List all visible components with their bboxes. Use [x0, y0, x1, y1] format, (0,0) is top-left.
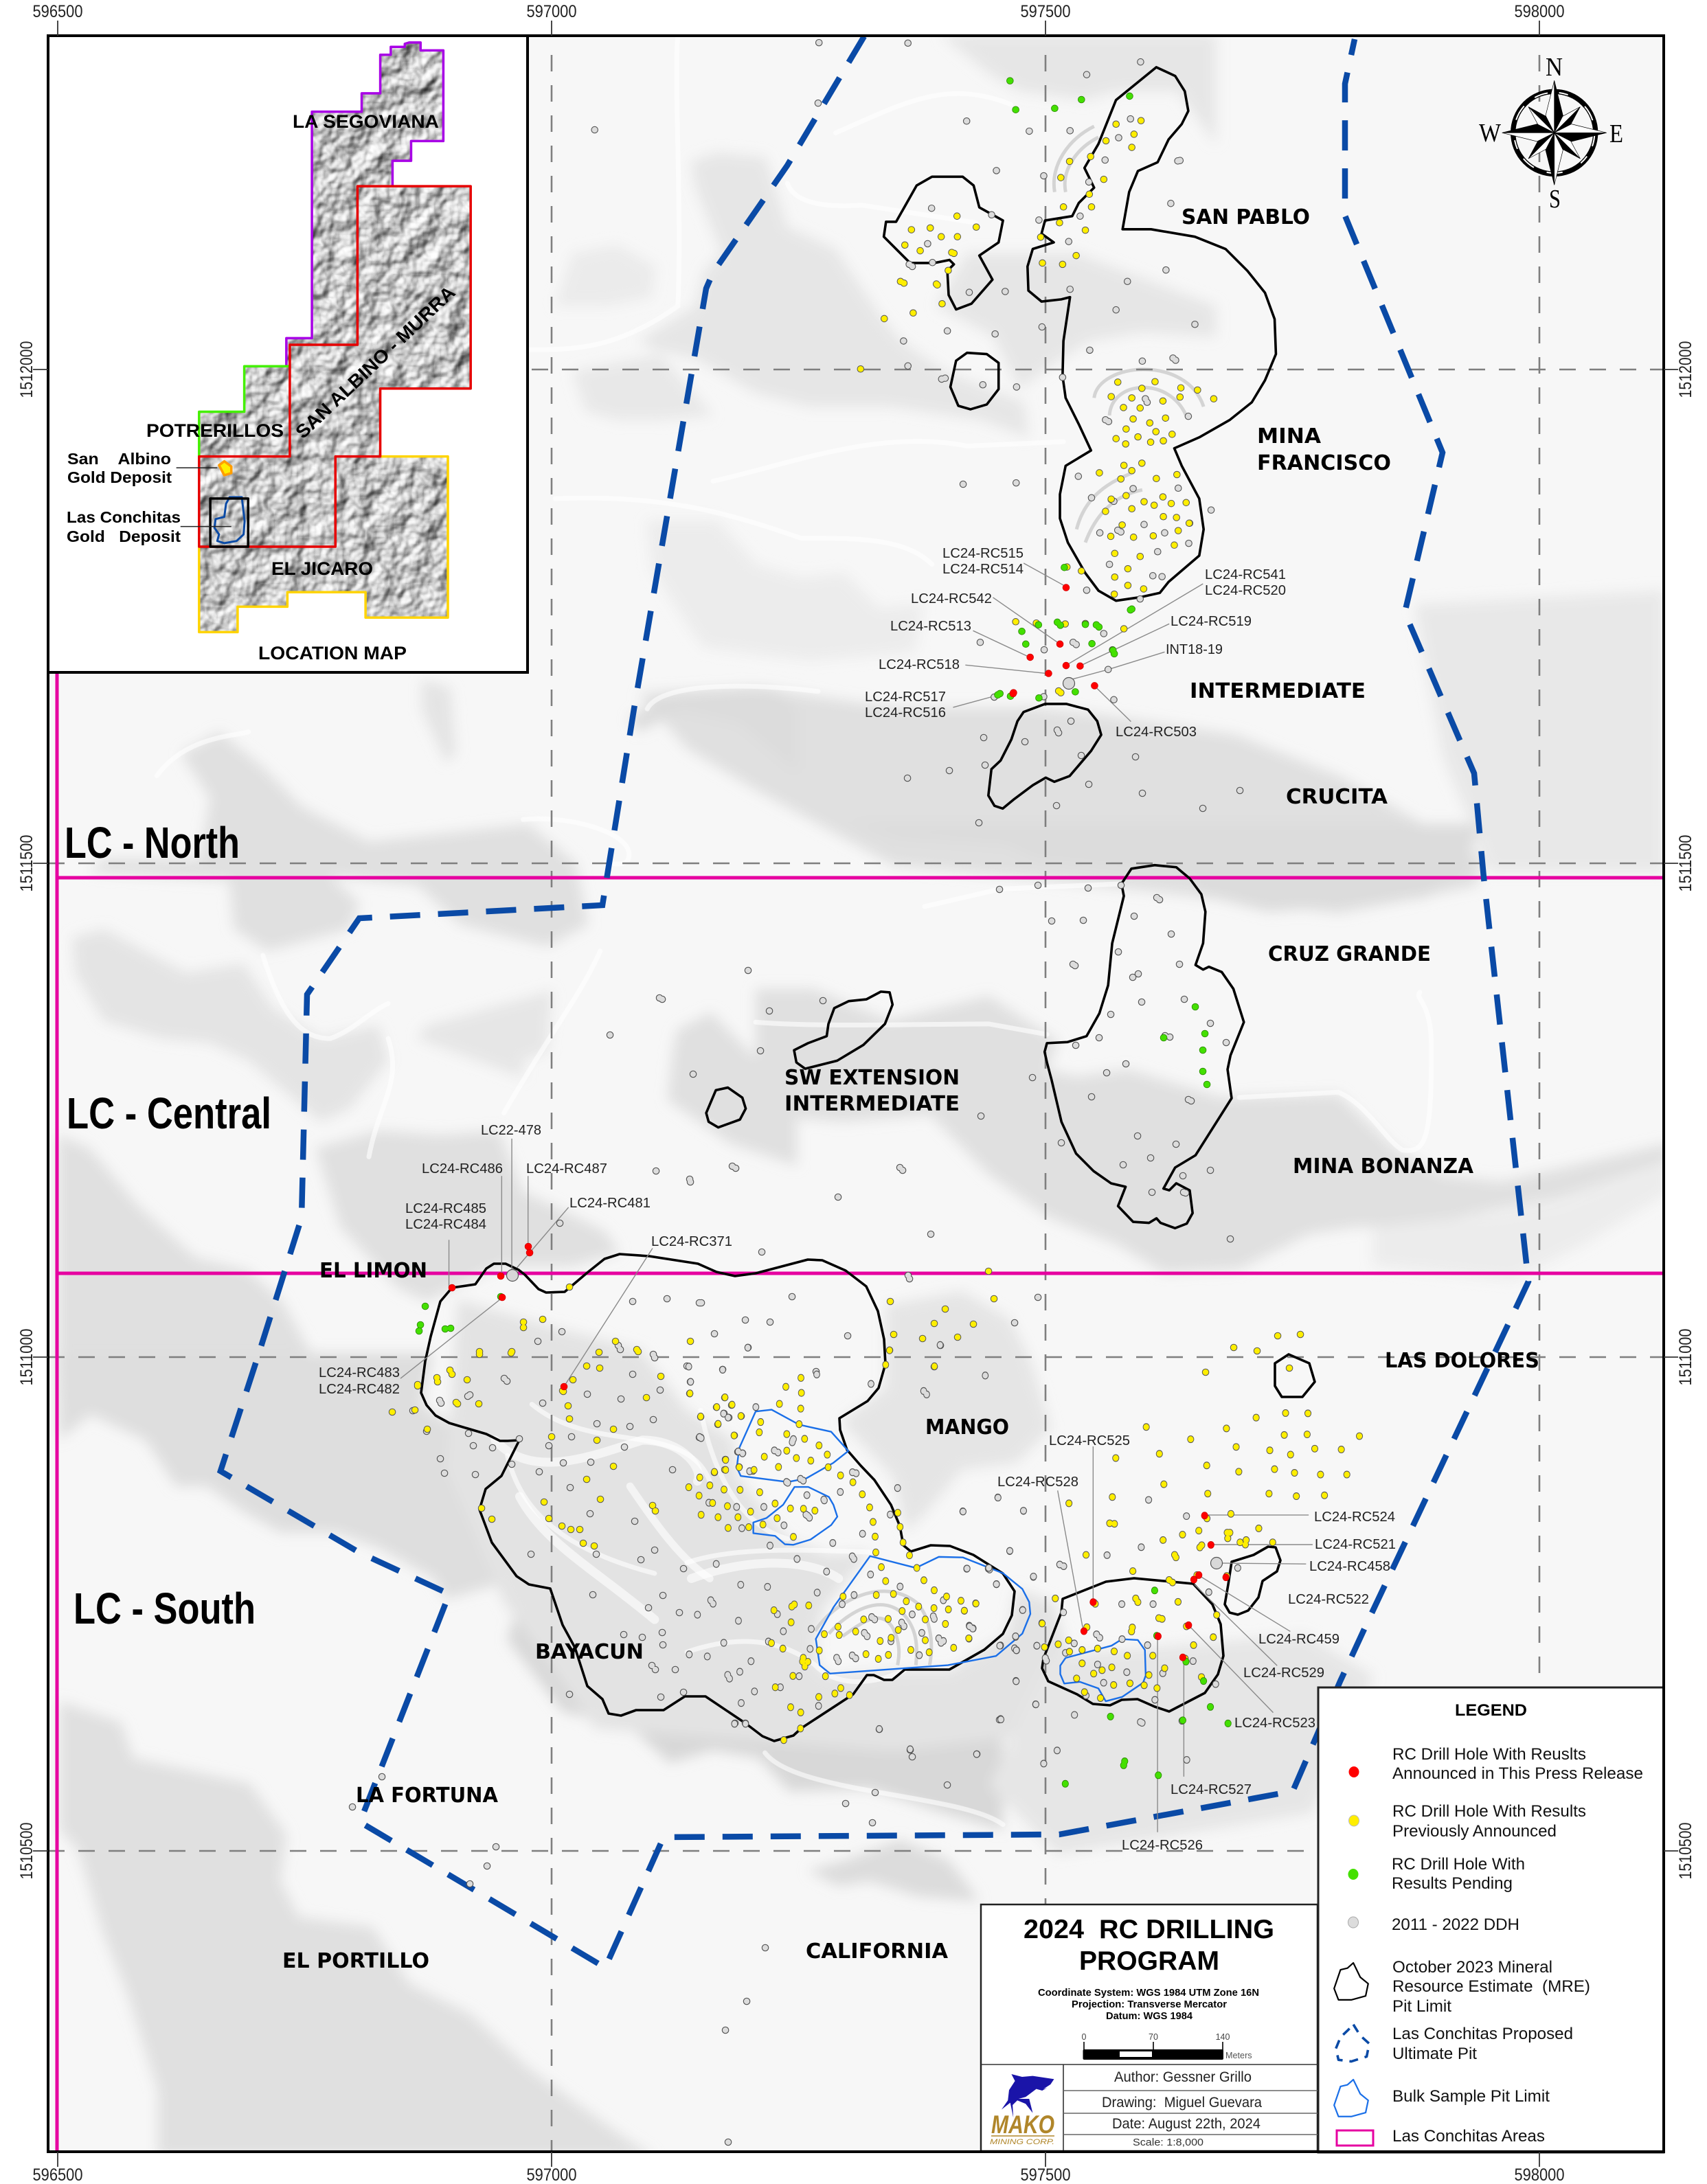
axis coordinate labels: 1512000 [17, 341, 36, 398]
legend title: LEGEND [1455, 1701, 1527, 1720]
drill hole labels: LC24-RC459 [1258, 1631, 1339, 1647]
zone name labels: MANGO [925, 1415, 1009, 1440]
bulk sample pit limits [737, 1410, 1146, 1701]
main title: PROGRAM [1079, 1946, 1219, 1976]
axis coordinate labels: 1510500 [17, 1823, 36, 1879]
legend: proposed ultimate pit: Las Conchitas Proposed [1392, 2025, 1573, 2043]
axis coordinate labels: 1511500 [17, 835, 36, 891]
drill hole labels: LC24-RC503 [1116, 724, 1197, 740]
credits: Date: August 22th, 2024 [1112, 2116, 1261, 2132]
legend: green hole: Results Pending [1392, 1874, 1513, 1893]
zone name labels: MINA [1257, 424, 1322, 448]
2011-2022 DDH holes north [595, 43, 1211, 700]
axis coordinate labels: 598000 [1514, 2, 1565, 21]
zone name labels: EL LIMON [319, 1259, 427, 1283]
icon: compass rose: N [1546, 53, 1563, 82]
zone name labels: BAYACUN [535, 1640, 644, 1664]
RC holes this release central [452, 1247, 564, 1387]
drill holes: Bayacun core [689, 1345, 1042, 1749]
drill hole labels: LC24-RC520 [1205, 582, 1286, 598]
drill hole labels: LC24-RC528 [997, 1474, 1078, 1490]
axis coordinate labels: 597500 [1021, 2, 1070, 21]
drill hole labels: LC24-RC518 [879, 657, 960, 672]
credits [1102, 2069, 1262, 2148]
terrain: Bayacun pit surroundings [446, 1300, 1076, 1751]
large DDH marker LC22-478 [507, 1269, 518, 1282]
drill hole labels: LC24-RC525 [1049, 1433, 1130, 1448]
drill hole labels: LC22-478 [481, 1122, 541, 1138]
scale bar [1082, 2032, 1252, 2060]
drill holes: north zone [595, 43, 1214, 700]
leader lines [400, 563, 1313, 1832]
terrain: LC north-central left slopes [58, 679, 797, 1353]
zone name labels: CRUZ GRANDE [1268, 942, 1431, 966]
credits: Drawing: Miguel Guevara [1102, 2095, 1262, 2111]
legend: MRE pit limit: October 2023 Mineral [1392, 1958, 1552, 1977]
Las Conchitas area boundaries [57, 672, 1664, 2152]
drill hole labels: LC24-RC516 [865, 705, 946, 720]
icon: Mako Mining logo: MAKO [991, 2111, 1054, 2139]
scale bar: 140 [1216, 2032, 1230, 2042]
drill holes: east zone [963, 1413, 1359, 1784]
RC holes this release north [1013, 588, 1094, 694]
axis coordinate labels: 1512000 [1676, 341, 1695, 398]
legend: red hole: Announced in This Press Release [1392, 1764, 1643, 1783]
pit: San Pablo / Mina Francisco [884, 67, 1276, 601]
zone name labels: MINA BONANZA [1293, 1154, 1474, 1179]
axis coordinate labels: 1510500 [1676, 1823, 1695, 1879]
legend: yellow hole: RC Drill Hole With Results [1392, 1802, 1586, 1821]
axis coordinate labels: 597000 [526, 2, 577, 21]
inset labels [67, 111, 460, 663]
drill hole labels: LC24-RC517 [865, 689, 946, 705]
inset labels: Gold Deposit [67, 527, 181, 545]
axis coordinate labels: 1511000 [1676, 1328, 1695, 1386]
coordinate system note: Datum: WGS 1984 [1106, 2010, 1193, 2022]
coordinate system note: Projection: Transverse Mercator [1072, 1999, 1227, 2010]
drill hole labels: LC24-RC487 [526, 1161, 607, 1176]
zone name labels: SW EXTENSION [784, 1066, 960, 1090]
coordinate system note: Coordinate System: WGS 1984 UTM Zone 16N [1038, 1987, 1259, 1999]
drill hole labels: LC24-RC482 [319, 1381, 400, 1397]
drill holes: central and El Limon zones [352, 721, 1300, 2142]
legend: yellow hole [1349, 1802, 1586, 1841]
drill hole labels: LC24-RC526 [1122, 1837, 1203, 1853]
pit: small SW circle [706, 1088, 746, 1128]
drill hole labels: LC24-RC484 [405, 1216, 486, 1232]
zone name labels [282, 205, 1539, 1973]
inset labels: Gold Deposit [67, 468, 172, 486]
zone name labels: EL PORTILLO [282, 1949, 429, 1973]
inset concession boundaries [177, 43, 471, 632]
drill hole labels: LC24-RC371 [651, 1233, 732, 1249]
legend: proposed ultimate pit [1336, 2025, 1573, 2063]
roads and terrace lines [157, 34, 1432, 1825]
drill hole labels: LC24-RC515 [942, 545, 1024, 561]
axis coordinate labels: 1511000 [17, 1328, 36, 1386]
inset labels: LA SEGOVIANA [293, 111, 439, 132]
panel: legend [1318, 1687, 1664, 2152]
inset terrain hillshade [185, 38, 488, 642]
pit: east Las Dolores [1042, 1578, 1223, 1711]
zone name labels: SAN PABLO [1182, 205, 1310, 229]
credits: Scale: 1:8,000 [1133, 2137, 1203, 2148]
pit: Cruz Grande / Mina Bonanza and SW Extension [794, 865, 1244, 1228]
drill hole labels: LC24-RC514 [942, 561, 1024, 577]
scale bar: 70 [1149, 2032, 1158, 2042]
legend: red hole [1349, 1745, 1643, 1783]
drill hole labels: INT18-19 [1166, 641, 1223, 657]
drill hole labels: LC24-RC519 [1171, 613, 1252, 629]
legend: green hole: RC Drill Hole With [1392, 1855, 1525, 1874]
area labels LC North Central South [65, 818, 271, 1633]
legend: yellow hole: Previously Announced [1392, 1822, 1557, 1841]
legend: MRE pit limit: Pit Limit [1392, 1997, 1451, 2016]
zone name labels: INTERMEDIATE [784, 1092, 960, 1116]
zone name labels: LAS DOLORES [1385, 1349, 1539, 1373]
terrain: LC south slopes [56, 1353, 1003, 2157]
drill hole labels: LC24-RC527 [1171, 1782, 1252, 1797]
zone name labels: LA FORTUNA [356, 1784, 499, 1808]
legend: green hole [1348, 1855, 1525, 1893]
panel: location map inset [48, 36, 528, 672]
drill hole labels: LC24-RC483 [319, 1365, 400, 1380]
area labels LC North Central South: LC - Central [67, 1089, 271, 1138]
icon: compass rose: W [1479, 119, 1501, 148]
MRE pit limits [421, 67, 1315, 1741]
inset labels: SAN ALBINO - MURRA [291, 282, 460, 442]
RC holes previously announced central [392, 1271, 1300, 1546]
legend: red hole: RC Drill Hole With Reuslts [1392, 1745, 1586, 1764]
axis coordinate labels: 1511500 [1676, 835, 1695, 891]
drill hole labels: LC24-RC458 [1309, 1558, 1390, 1574]
credits: Author: Gessner Grillo [1114, 2069, 1252, 2085]
drill hole labels [319, 545, 1396, 1853]
panel: title block [981, 1904, 1318, 2151]
zone name labels: FRANCISCO [1257, 451, 1391, 475]
drill hole labels: LC24-RC486 [422, 1161, 503, 1176]
drill hole labels: LC24-RC541 [1205, 567, 1286, 582]
legend: proposed ultimate pit: Ultimate Pit [1392, 2045, 1477, 2063]
inset labels: EL JICARO [271, 558, 373, 579]
axis coordinate labels: 596500 [33, 2, 82, 21]
main title: 2024 RC DRILLING [1024, 1915, 1274, 1944]
RC holes pending central [419, 1007, 1207, 1331]
zone name labels: INTERMEDIATE [1190, 679, 1366, 703]
icon: Mako Mining logo [990, 2074, 1054, 2146]
proposed ultimate pit [221, 36, 1528, 1968]
legend: MRE pit limit [1334, 1958, 1590, 2016]
zone name labels: CRUCITA [1286, 785, 1388, 809]
drill hole labels: LC24-RC542 [911, 591, 992, 606]
inset labels: San Albino [67, 450, 171, 468]
area labels LC North Central South: LC - North [65, 818, 240, 867]
drill hole labels: LC24-RC529 [1243, 1665, 1324, 1681]
icon: compass rose: E [1609, 120, 1623, 148]
legend: bulk sample [1334, 2080, 1550, 2117]
drill hole labels: LC24-RC481 [569, 1195, 651, 1211]
inset labels: POTRERILLOS [146, 420, 284, 441]
inset labels: LOCATION MAP [258, 643, 407, 663]
drill hole labels: LC24-RC524 [1314, 1509, 1395, 1525]
area labels LC North Central South: LC - South [74, 1584, 256, 1633]
large DDH marker LC24-RC458 [1210, 1558, 1223, 1569]
scale bar: Meters [1225, 2051, 1252, 2060]
drill hole labels: LC24-RC522 [1288, 1591, 1369, 1607]
drill hole labels: LC24-RC521 [1315, 1536, 1396, 1552]
main title [1024, 1915, 1274, 1976]
terrain: east zone [989, 1635, 1374, 1854]
icon: compass rose: S [1549, 185, 1561, 214]
icon: Mako Mining logo: MINING CORP. [990, 2138, 1054, 2146]
terrain: Mango slope [841, 1291, 1051, 1532]
drill hole labels: LC24-RC523 [1234, 1715, 1315, 1731]
drill hole labels: LC24-RC513 [890, 618, 971, 634]
zone name labels: CALIFORNIA [806, 1940, 949, 1964]
terrain: intermediate band [639, 687, 1484, 913]
large DDH marker INT18-19 [1063, 677, 1074, 690]
RC holes previously announced north [861, 121, 1214, 693]
coordinate system note [1038, 1987, 1259, 2022]
legend: bulk sample: Bulk Sample Pit Limit [1392, 2087, 1550, 2106]
pit: Bayacun [421, 1254, 1015, 1741]
legend: MRE pit limit: Resource Estimate (MRE) [1392, 1977, 1590, 1996]
RC holes pending north [997, 81, 1132, 698]
legend: grey DDH: 2011 - 2022 DDH [1392, 1915, 1519, 1934]
scale bar: 0 [1082, 2032, 1087, 2042]
pit: Crucita [988, 704, 1101, 808]
legend: Las Conchitas areas: Las Conchitas Areas [1392, 2127, 1545, 2146]
inset labels: Las Conchitas [67, 508, 181, 526]
terrain: north slopes [555, 34, 1216, 661]
drill hole labels: LC24-RC485 [405, 1201, 486, 1216]
terrain: central slope [756, 824, 1669, 1279]
2011-2022 DDH holes central [352, 721, 1240, 2142]
icon: compass rose [1479, 53, 1623, 214]
